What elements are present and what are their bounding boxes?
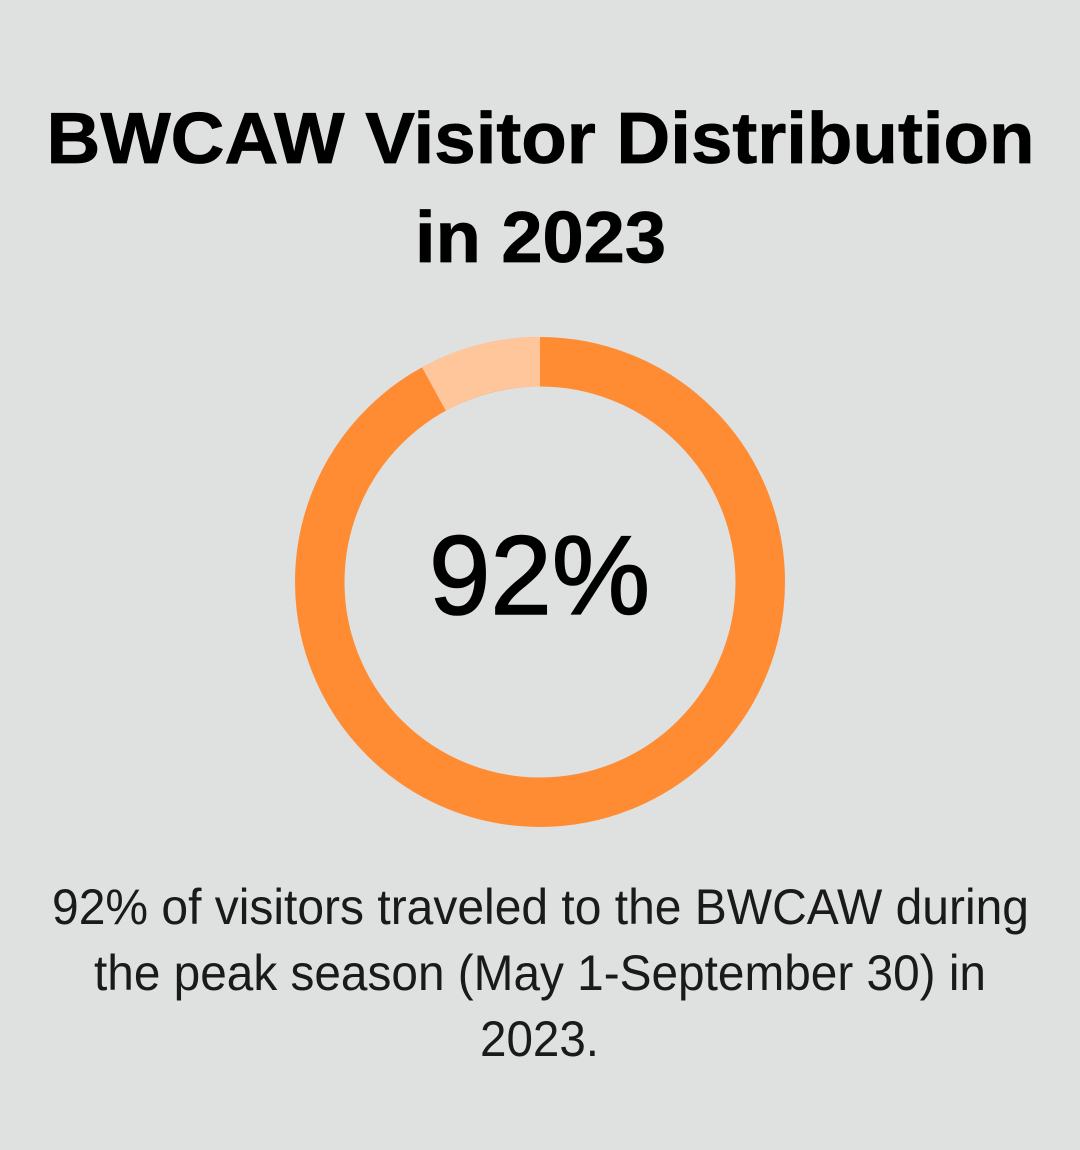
- description: 92% of visitors traveled to the BWCAW during: [52, 879, 1029, 935]
- title: [46, 99, 1034, 278]
- center value: 92%: [429, 513, 650, 638]
- description: [52, 879, 1029, 1067]
- description: 2023.: [480, 1011, 599, 1067]
- segment: remaining 8%: [434, 362, 540, 389]
- title: BWCAW Visitor Distribution: [46, 99, 1034, 179]
- description: the peak season (May 1-September 30) in: [94, 945, 986, 1001]
- segment: peak season 92%: [320, 362, 760, 802]
- donut chart: [320, 362, 760, 802]
- title: in 2023: [415, 198, 666, 278]
